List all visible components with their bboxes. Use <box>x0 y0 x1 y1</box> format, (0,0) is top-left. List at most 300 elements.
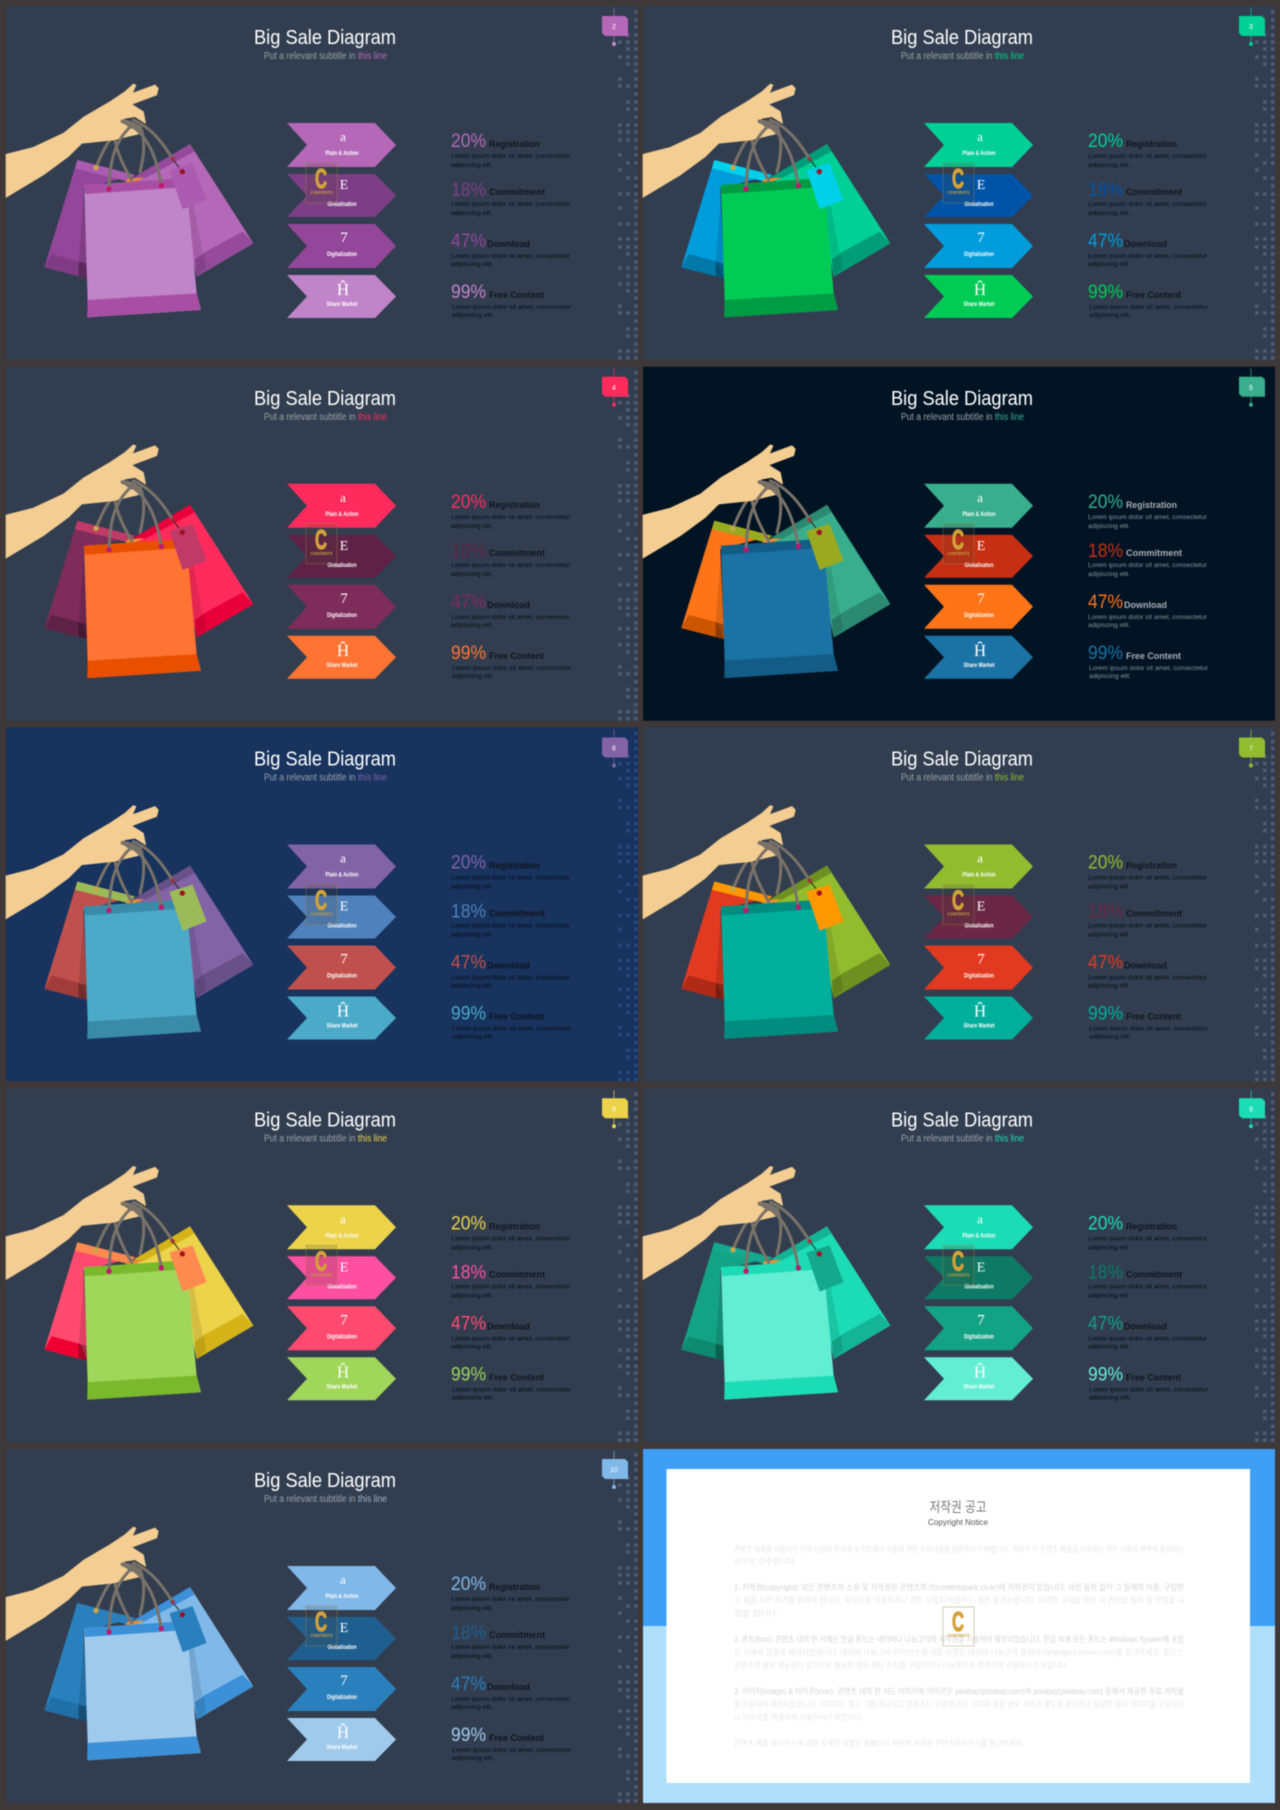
page number tag: 10 <box>610 1467 618 1474</box>
statistics list: 47% <box>1088 231 1123 252</box>
statistics list: Lorem ipsum dolor sit amet, consectetur <box>1088 153 1208 160</box>
arrow list: E <box>340 1260 348 1275</box>
arrow list: Share Market <box>964 1383 995 1390</box>
arrow list <box>924 1205 1033 1400</box>
arrow list: Share Market <box>964 301 995 308</box>
statistics list: adipiscing elit. <box>451 1653 493 1660</box>
page number tag <box>1239 369 1265 407</box>
statistics list: adipiscing elit. <box>451 932 493 938</box>
page number tag <box>602 1090 628 1128</box>
slide 6: royal blue background <box>6 728 638 1082</box>
page number tag <box>602 369 628 407</box>
slide 8: yellow, pink, green <box>6 1088 638 1442</box>
arrow list: Ĥ <box>337 641 349 660</box>
statistics list: Commitment <box>1126 187 1183 198</box>
arrow list: Globalisation <box>964 922 994 930</box>
statistics list: Lorem ipsum dolor sit amet, consectetur <box>451 1644 571 1651</box>
slide 2: purple <box>6 6 638 360</box>
statistics list: Lorem ipsum dolor sit amet, consectetur <box>1088 614 1208 621</box>
statistics list: 47% <box>1088 1313 1123 1334</box>
illustration: hand holding shopping bags <box>6 1166 253 1400</box>
slide 3: green and blue <box>643 6 1275 360</box>
statistics list: 18% <box>451 1262 486 1283</box>
statistics list: 20% <box>1088 492 1123 513</box>
statistics list: Download <box>1124 960 1167 972</box>
arrow list: a <box>977 1211 983 1226</box>
subtitle: Put a relevant subtitle in this line <box>901 51 1024 62</box>
statistics list: Free Content <box>489 1012 545 1022</box>
arrow list: a <box>977 490 983 505</box>
notice body text: 콘텐츠 제품 라이선스에 대한 자세한 사항은 홈페이지 하단의 자세한 콘텐츠라이선스를 참고하세요. <box>734 1738 1024 1748</box>
arrow list: E <box>340 539 348 554</box>
statistics list: adipiscing elit. <box>1088 1292 1130 1299</box>
statistics list: 20% <box>451 1574 486 1595</box>
statistics list: 47% <box>451 1313 486 1334</box>
statistics list: Lorem ipsum dolor sit amet, consectetur <box>451 1335 571 1342</box>
notice body text: 3. 이미지(image) & 아이콘(icon): 콘텐츠 내의 한 서드 이미지와 아이콘은 pixabay(pixabay.com)와 pixabay(pixabay.com) 등에서 제공한 무료 저작물 <box>734 1686 1184 1696</box>
statistics list: Commitment <box>489 1630 546 1641</box>
watermark logo <box>943 1606 974 1646</box>
statistics list: Registration <box>489 1582 540 1593</box>
arrow list: Share Market <box>964 1022 995 1030</box>
statistics list: Lorem ipsum dolor sit amet, consectetur <box>451 1696 571 1703</box>
arrow list <box>924 844 1033 1040</box>
statistics list <box>1088 1213 1209 1401</box>
statistics list: Download <box>487 960 530 972</box>
statistics list: Lorem ipsum dolor sit amet, consectetur <box>1089 1386 1209 1393</box>
statistics list: Download <box>487 239 530 250</box>
title: Big Sale Diagram <box>254 388 396 410</box>
arrow list: 7 <box>340 1673 348 1689</box>
arrow list: Digitalization <box>964 251 994 258</box>
illustration: hand holding shopping bags <box>643 445 890 678</box>
watermark logo: CONTENTS <box>310 1272 332 1277</box>
statistics list: 99% <box>451 1004 486 1024</box>
statistics list: adipiscing elit. <box>451 1244 493 1251</box>
arrow list: a <box>340 490 346 505</box>
watermark logo <box>943 1245 974 1285</box>
arrow list <box>287 1566 396 1761</box>
statistics list: Registration <box>1126 1221 1177 1232</box>
arrow list: Digitalization <box>327 972 357 980</box>
statistics list: Commitment <box>1126 548 1183 559</box>
statistics list: Lorem ipsum dolor sit amet, consectetur <box>1088 514 1208 521</box>
subtitle: Put a relevant subtitle in this line <box>264 772 387 784</box>
statistics list: adipiscing elit. <box>1088 210 1130 217</box>
arrow list: Ĥ <box>337 1002 349 1020</box>
statistics list: Lorem ipsum dolor sit amet, consectetur <box>1088 253 1208 260</box>
arrow list: Ĥ <box>337 280 349 299</box>
arrow list: a <box>977 850 983 866</box>
statistics list: adipiscing elit. <box>1088 1343 1130 1350</box>
watermark logo <box>306 524 337 564</box>
arrow list: Globalisation <box>328 922 357 930</box>
title: Big Sale Diagram <box>254 748 396 770</box>
page number tag: 7 <box>1249 746 1253 752</box>
statistics list: 20% <box>1088 1213 1123 1234</box>
statistics list: 47% <box>451 1674 486 1695</box>
arrow list: Ĥ <box>974 641 986 660</box>
statistics list: adipiscing elit. <box>1089 312 1131 319</box>
statistics list: adipiscing elit. <box>451 884 493 890</box>
watermark logo: C <box>315 1245 327 1276</box>
arrow list: 7 <box>977 230 985 246</box>
arrow list: 7 <box>977 952 985 968</box>
statistics list: Commitment <box>1126 1269 1183 1280</box>
statistics list: adipiscing elit. <box>452 1034 494 1040</box>
subtitle: Put a relevant subtitle in this line <box>264 412 387 423</box>
statistics list: Free Content <box>1126 1372 1182 1383</box>
statistics list: Lorem ipsum dolor sit amet, consectetur <box>451 1283 571 1290</box>
statistics list: 99% <box>1088 643 1123 664</box>
title: Big Sale Diagram <box>254 1109 396 1131</box>
arrow list: 7 <box>340 952 348 968</box>
arrow list: E <box>977 1260 985 1275</box>
arrow list: Share Market <box>964 662 995 669</box>
arrow list: Globalisation <box>964 562 994 569</box>
statistics list: 18% <box>451 541 486 562</box>
watermark logo: C <box>315 884 327 916</box>
notice body text: 사 제품 사전 허가를 받아야 합니다. 목적으로 이용하거나 개인 사용자 이용하는 것은 불가능합니다. 이러한 규칙을 위반 시 관련법 절차 및 처벌을 시 <box>734 1595 1184 1605</box>
statistics list: 18% <box>1088 902 1123 922</box>
arrow list: Digitalization <box>327 612 357 619</box>
statistics list: adipiscing elit. <box>451 1343 493 1350</box>
statistics list: 20% <box>451 1213 486 1234</box>
statistics list: Free Content <box>489 651 545 662</box>
statistics list: 20% <box>451 131 486 152</box>
notice body text: 콘텐츠의 필요 제공되지 않으므로 필요한 경우 해당 폰트를 구입하거나 나눔폰트로 변경하여 사용하시기 바랍니다. <box>734 1660 1069 1670</box>
statistics list: adipiscing elit. <box>451 1704 493 1711</box>
subtitle: Put a relevant subtitle in this line <box>901 412 1024 423</box>
arrow list: Globalisation <box>328 562 357 569</box>
page number tag <box>602 730 628 768</box>
arrow list: Digitalization <box>964 972 994 980</box>
statistics list: Lorem ipsum dolor sit amet, consectetur <box>1088 874 1208 882</box>
statistics list: Lorem ipsum dolor sit amet, consectetur <box>1088 1283 1208 1290</box>
statistics list: Registration <box>489 1221 540 1232</box>
arrow list <box>287 1205 396 1400</box>
statistics list: Lorem ipsum dolor sit amet, consectetur <box>451 874 571 882</box>
statistics list: Registration <box>1126 139 1177 150</box>
statistics list: adipiscing elit. <box>451 162 493 169</box>
statistics list: Commitment <box>489 548 546 559</box>
statistics list: Lorem ipsum dolor sit amet, consectetur <box>452 665 572 672</box>
statistics list: adipiscing elit. <box>451 622 493 629</box>
statistics list: 18% <box>1088 541 1123 562</box>
statistics list: adipiscing elit. <box>1088 884 1130 890</box>
statistics list: Free Content <box>1126 1012 1182 1022</box>
statistics list: Free Content <box>489 1372 545 1383</box>
statistics list: Lorem ipsum dolor sit amet, consectetur <box>452 1026 572 1032</box>
statistics list: Lorem ipsum dolor sit amet, consectetur <box>451 974 571 982</box>
watermark logo <box>943 524 974 564</box>
arrow list: Digitalization <box>964 1333 994 1340</box>
arrow list: a <box>340 850 346 866</box>
arrow list: E <box>977 539 985 554</box>
arrow list: Plain & Action <box>326 872 359 878</box>
arrow list <box>924 123 1033 318</box>
statistics list: Lorem ipsum dolor sit amet, consectetur <box>1089 1026 1209 1032</box>
watermark logo <box>306 163 337 203</box>
statistics list: Lorem ipsum dolor sit amet, consectetur <box>1089 665 1209 672</box>
statistics list: Free Content <box>1126 290 1182 301</box>
watermark logo <box>306 1606 337 1646</box>
statistics list: adipiscing elit. <box>1088 932 1130 938</box>
title: Big Sale Diagram <box>254 27 396 49</box>
watermark logo: CONTENTS <box>948 190 970 195</box>
statistics list: Lorem ipsum dolor sit amet, consectetur <box>1088 201 1208 208</box>
notice body text: 것으로 간주됩니다. <box>734 1556 797 1566</box>
statistics list: adipiscing elit. <box>1088 571 1130 578</box>
watermark logo: C <box>952 163 964 194</box>
statistics list: 99% <box>451 643 486 664</box>
illustration: hand holding shopping bags <box>6 84 253 317</box>
statistics list: adipiscing elit. <box>451 523 493 530</box>
statistics list: Lorem ipsum dolor sit amet, consectetur <box>451 153 571 160</box>
page number tag: 2 <box>612 24 616 31</box>
statistics list: adipiscing elit. <box>452 1755 494 1762</box>
illustration: hand holding shopping bags <box>643 1166 890 1400</box>
watermark logo: CONTENTS <box>948 551 970 556</box>
statistics list: Lorem ipsum dolor sit amet, consectetur <box>451 922 571 930</box>
watermark logo: C <box>952 1245 964 1276</box>
notice body text: 행할 합니다. <box>734 1608 779 1618</box>
statistics list: adipiscing elit. <box>451 982 493 990</box>
arrow list: 7 <box>340 230 348 246</box>
watermark logo: C <box>952 1606 964 1637</box>
page number tag <box>1239 8 1265 46</box>
watermark logo <box>943 884 974 924</box>
arrow list: Plain & Action <box>962 1232 996 1239</box>
subtitle: Put a relevant subtitle in this line <box>264 1494 387 1505</box>
statistics list: adipiscing elit. <box>1089 1394 1131 1401</box>
statistics list: 18% <box>451 180 486 201</box>
illustration: hand holding shopping bags <box>643 805 890 1039</box>
slide 5: dark navy background <box>643 367 1275 721</box>
watermark logo: CONTENTS <box>310 190 332 195</box>
statistics list: Registration <box>489 500 540 511</box>
statistics list: Lorem ipsum dolor sit amet, consectetur <box>451 1596 571 1603</box>
arrow list: Plain & Action <box>962 511 996 518</box>
page number tag: 3 <box>1249 24 1253 31</box>
page number tag <box>1239 1090 1265 1128</box>
statistics list: Registration <box>1126 500 1177 511</box>
arrow list: Share Market <box>326 1744 358 1751</box>
statistics list <box>1088 131 1209 319</box>
subtitle: Put a relevant subtitle in this line <box>264 51 387 62</box>
statistics list: 18% <box>1088 180 1123 201</box>
watermark logo: CONTENTS <box>310 1633 332 1638</box>
watermark logo: C <box>315 524 327 555</box>
page number tag: 8 <box>612 1106 616 1113</box>
statistics list: adipiscing elit. <box>1088 1244 1130 1251</box>
statistics list: Lorem ipsum dolor sit amet, consectetur <box>451 1235 571 1242</box>
statistics list: Lorem ipsum dolor sit amet, consectetur <box>451 253 571 260</box>
arrow list: Share Market <box>326 662 358 669</box>
statistics list <box>1088 852 1209 1040</box>
title: Big Sale Diagram <box>254 1470 396 1492</box>
watermark logo: CONTENTS <box>948 1272 970 1277</box>
arrow list: E <box>977 900 985 914</box>
title: Big Sale Diagram <box>891 748 1033 770</box>
watermark logo <box>306 1245 337 1285</box>
watermark logo: C <box>952 524 964 555</box>
arrow list: Ĥ <box>337 1362 349 1381</box>
statistics list: Registration <box>489 139 540 150</box>
illustration: hand holding shopping bags <box>6 805 253 1039</box>
arrow list: E <box>340 900 348 914</box>
statistics list: adipiscing elit. <box>451 261 493 268</box>
arrow list: Plain & Action <box>326 511 359 518</box>
arrow list <box>287 123 396 318</box>
watermark logo: C <box>315 1606 327 1637</box>
arrow list: Digitalization <box>327 251 357 258</box>
statistics list: Commitment <box>489 1269 546 1280</box>
statistics list <box>451 852 572 1040</box>
illustration: hand holding shopping bags <box>643 84 890 317</box>
statistics list: Lorem ipsum dolor sit amet, consectetur <box>1088 922 1208 930</box>
statistics list: Download <box>1124 600 1167 611</box>
subtitle: Put a relevant subtitle in this line <box>264 1133 387 1144</box>
arrow list: Plain & Action <box>326 1232 359 1239</box>
arrow list: Globalisation <box>964 201 994 208</box>
statistics list: Lorem ipsum dolor sit amet, consectetur <box>1089 304 1209 311</box>
statistics list: adipiscing elit. <box>451 1605 493 1612</box>
title: Big Sale Diagram <box>891 1109 1033 1131</box>
arrow list: Globalisation <box>964 1283 994 1290</box>
statistics list: adipiscing elit. <box>452 312 494 319</box>
statistics list: adipiscing elit. <box>451 1292 493 1299</box>
arrow list <box>924 484 1033 679</box>
statistics list: 99% <box>451 282 486 303</box>
statistics list: adipiscing elit. <box>1089 1034 1131 1040</box>
statistics list: Lorem ipsum dolor sit amet, consectetur <box>451 201 571 208</box>
statistics list: Lorem ipsum dolor sit amet, consectetur <box>451 614 571 621</box>
statistics list: Lorem ipsum dolor sit amet, consectetur <box>451 562 571 569</box>
arrow list: Digitalization <box>327 1333 357 1340</box>
statistics list: 99% <box>1088 1364 1123 1385</box>
statistics list: 20% <box>1088 131 1123 152</box>
statistics list: adipiscing elit. <box>1088 261 1130 268</box>
watermark logo: C <box>315 163 327 194</box>
statistics list: adipiscing elit. <box>452 1394 494 1401</box>
statistics list: 47% <box>451 592 486 613</box>
arrow list: Ĥ <box>974 1002 986 1020</box>
statistics list: 99% <box>451 1364 486 1385</box>
statistics list: Download <box>487 600 530 611</box>
arrow list: 7 <box>340 1312 348 1328</box>
statistics list: Download <box>1124 239 1167 250</box>
page number tag: 4 <box>612 385 616 392</box>
statistics list: adipiscing elit. <box>1089 673 1131 680</box>
arrow list: Ĥ <box>974 1362 986 1381</box>
arrow list: E <box>340 1621 348 1636</box>
arrow list: Plain & Action <box>326 150 359 157</box>
notice body text: 1. 저작권(copyright): 모든 콘텐츠의 소유 및 저작권은 콘텐츠파크(contentspark.co.kr)에 저작권이 있습니다. 사전 동의 없이 그 일체의 이용, 구입한 <box>734 1582 1185 1592</box>
watermark logo: C <box>952 884 964 916</box>
watermark logo: CONTENTS <box>948 1633 970 1638</box>
arrow list: a <box>340 129 346 144</box>
illustration: hand holding shopping bags <box>6 1527 253 1760</box>
statistics list: Lorem ipsum dolor sit amet, consectetur <box>1088 1235 1208 1242</box>
arrow list: 7 <box>977 1312 985 1328</box>
notice heading: 저작권 공고 <box>930 1499 987 1515</box>
page number tag: 5 <box>1249 385 1253 392</box>
statistics list: 47% <box>451 231 486 252</box>
statistics list: 18% <box>451 1623 486 1644</box>
page number tag <box>602 8 628 46</box>
statistics list: 99% <box>1088 1004 1123 1024</box>
statistics list: adipiscing elit. <box>451 571 493 578</box>
statistics list <box>451 492 572 680</box>
slide: copyright notice <box>643 1449 1275 1803</box>
statistics list: Commitment <box>489 908 546 920</box>
statistics list: Lorem ipsum dolor sit amet, consectetur <box>451 514 571 521</box>
statistics list: Commitment <box>1126 908 1183 920</box>
statistics list <box>451 1574 572 1762</box>
statistics list: adipiscing elit. <box>451 210 493 217</box>
arrow list: 7 <box>977 591 985 607</box>
arrow list: Share Market <box>326 1383 358 1390</box>
arrow list: Digitalization <box>327 1694 357 1701</box>
arrow list <box>287 844 396 1040</box>
statistics list: 20% <box>451 492 486 513</box>
notice body text: 된 서체와 글꼴로 제작되었습니다. 네이버 나눔고딕 라이선스에 대한 사항은 네이버 나눔고딕 홈페이지(hangeul.naver.com)를 참고하세요. 폰트는 <box>734 1647 1184 1657</box>
statistics list: Lorem ipsum dolor sit amet, consectetur <box>1088 974 1208 982</box>
notice body text: 로 이용되어 제작되었습니다. 이미지는 참고 그림 제공되고 콘텐츠는 구분합니다. 이미지 포함 경우 귀하가 별도로 확인하고 필요한 경우 이미지를 구입하거 <box>734 1699 1184 1709</box>
page number tag: 9 <box>1249 1106 1253 1113</box>
arrow list: Globalisation <box>328 201 357 208</box>
slide 4: red and orange <box>6 367 638 721</box>
watermark logo: CONTENTS <box>310 551 332 556</box>
illustration: hand holding shopping bags <box>6 445 253 678</box>
watermark logo <box>943 163 974 203</box>
notice body text <box>734 1544 1185 1748</box>
arrow list: Digitalization <box>964 612 994 619</box>
statistics list: adipiscing elit. <box>452 673 494 680</box>
statistics list: Download <box>487 1682 530 1693</box>
slide 9: mint <box>643 1088 1275 1442</box>
arrow list: Share Market <box>326 301 358 308</box>
slide 7: lime and teal <box>643 728 1275 1082</box>
arrow list: Plain & Action <box>962 872 996 878</box>
slide 10: sky blue <box>6 1449 638 1803</box>
statistics list: Lorem ipsum dolor sit amet, consectetur <box>1088 1335 1208 1342</box>
statistics list: 20% <box>1088 852 1123 874</box>
arrow list: Ĥ <box>337 1723 349 1742</box>
watermark logo: CONTENTS <box>948 912 970 916</box>
arrow list: 7 <box>340 591 348 607</box>
arrow list <box>287 484 396 679</box>
arrow list: Plain & Action <box>962 150 996 157</box>
watermark logo: CONTENTS <box>310 912 332 916</box>
statistics list: adipiscing elit. <box>1088 162 1130 169</box>
statistics list: 47% <box>451 952 486 974</box>
statistics list: Registration <box>489 860 540 872</box>
statistics list <box>1088 492 1209 680</box>
arrow list: Share Market <box>326 1022 358 1030</box>
subtitle: Put a relevant subtitle in this line <box>901 772 1024 784</box>
arrow list: Plain & Action <box>326 1593 359 1600</box>
arrow list: a <box>977 129 983 144</box>
title: Big Sale Diagram <box>891 27 1033 49</box>
arrow list: a <box>340 1211 346 1226</box>
notice subheading: Copyright Notice <box>928 1517 988 1527</box>
statistics list: Free Content <box>489 1733 545 1744</box>
page number tag <box>1239 730 1265 768</box>
statistics list: Lorem ipsum dolor sit amet, consectetur <box>452 1386 572 1393</box>
statistics list: 18% <box>1088 1262 1123 1283</box>
